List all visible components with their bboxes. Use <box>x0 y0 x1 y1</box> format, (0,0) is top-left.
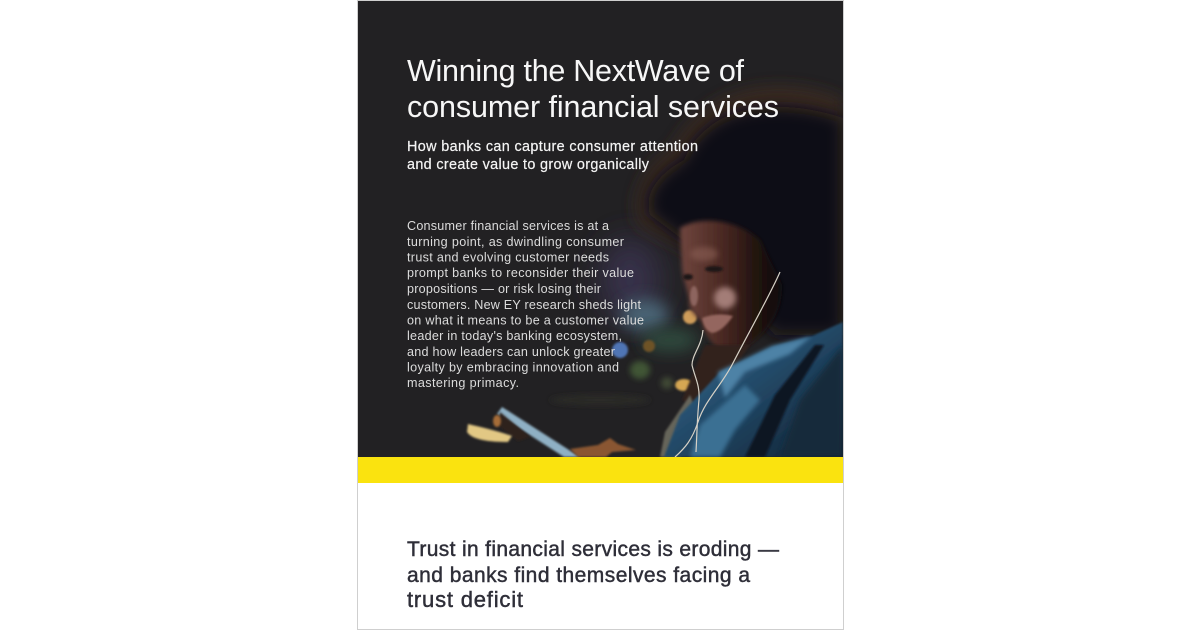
yellow band <box>358 457 843 483</box>
title <box>407 54 779 124</box>
page frame <box>358 0 844 630</box>
hair <box>637 87 843 335</box>
earphone wires <box>675 272 780 457</box>
title: consumer financial services <box>407 90 779 124</box>
intro paragraph: propositions — or risk losing their <box>407 282 601 296</box>
intro paragraph: trust and evolving customer needs <box>407 250 609 264</box>
intro paragraph <box>407 219 644 390</box>
phone <box>497 407 580 457</box>
intro paragraph: turning point, as dwindling consumer <box>407 235 624 249</box>
section heading: Trust in financial services is eroding — <box>407 538 779 561</box>
denim jacket <box>664 322 843 457</box>
phone glare and hand <box>467 424 512 442</box>
neck and inner shirt <box>682 345 750 405</box>
intro paragraph: on what it means to be a customer value <box>407 314 644 328</box>
intro paragraph: loyalty by embracing innovation and <box>407 360 619 374</box>
intro paragraph: Consumer financial services is at a <box>407 219 609 233</box>
intro paragraph: and how leaders can unlock greater <box>407 345 615 359</box>
intro paragraph: mastering primacy. <box>407 376 519 390</box>
intro paragraph: customers. New EY research sheds light <box>407 298 642 312</box>
subtitle <box>407 139 698 173</box>
bokeh background lights <box>550 238 698 405</box>
section heading <box>407 538 779 612</box>
title: Winning the NextWave of <box>407 54 745 88</box>
photo: woman looking at a phone at night <box>358 1 843 457</box>
document cover page <box>357 0 844 630</box>
section heading: trust deficit <box>407 587 523 612</box>
subtitle: How banks can capture consumer attention <box>407 139 698 155</box>
intro paragraph: leader in today's banking ecosystem, <box>407 329 622 343</box>
intro paragraph: prompt banks to reconsider their value <box>407 266 634 280</box>
section heading: and banks find themselves facing a <box>407 564 750 587</box>
subtitle: and create value to grow organically <box>407 157 650 173</box>
face <box>680 221 782 350</box>
